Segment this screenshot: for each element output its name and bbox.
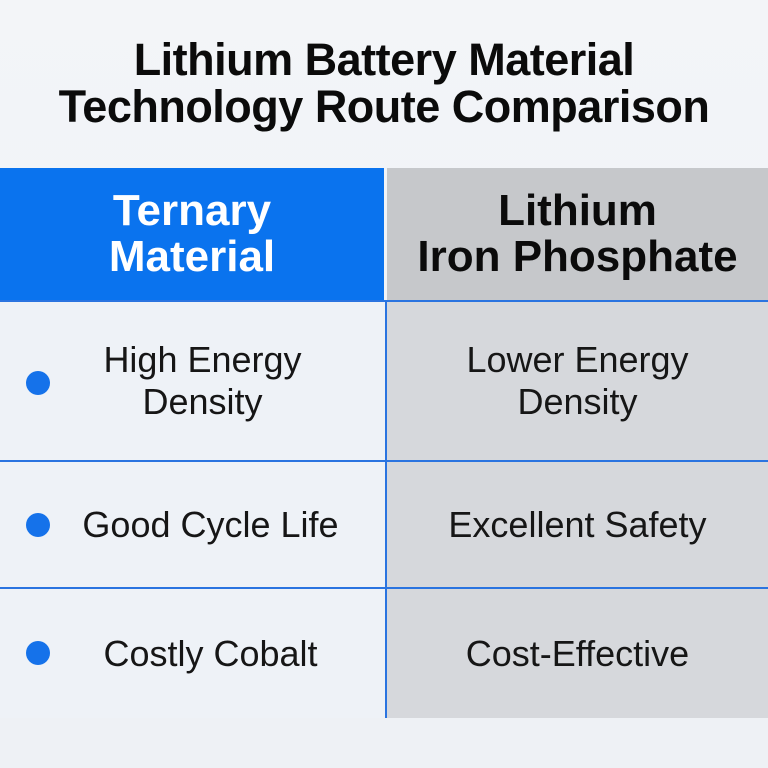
right cell: excellent safety	[385, 462, 768, 587]
header: ternary material: Ternary	[113, 186, 271, 235]
header: ternary material	[0, 168, 384, 300]
right cell: lower energy density: Density	[517, 381, 638, 422]
title: Lithium Battery Material	[134, 34, 634, 85]
header: lithium iron phosphate: Iron Phosphate	[417, 232, 738, 281]
bullet 2	[26, 513, 50, 537]
header: lithium iron phosphate	[387, 168, 768, 300]
right cell: cost-effective	[385, 589, 768, 718]
left cell: costly cobalt: Costly Cobalt	[103, 632, 318, 674]
left cell: high energy density: Density	[142, 381, 263, 422]
bullet 3	[26, 641, 50, 665]
left cell: good cycle life	[0, 462, 385, 587]
left cell: costly cobalt	[0, 589, 385, 718]
title	[59, 34, 709, 132]
left cell: high energy density	[0, 302, 385, 460]
header: ternary material: Material	[109, 232, 275, 281]
right cell: lower energy density: Lower Energy	[466, 339, 689, 380]
right cell: cost-effective: Cost-Effective	[466, 632, 689, 674]
left cell: high energy density: High Energy	[103, 339, 302, 380]
right cell: excellent safety: Excellent Safety	[448, 504, 707, 544]
title: Technology Route Comparison	[59, 81, 709, 132]
left cell: good cycle life: Good Cycle Life	[82, 504, 339, 544]
bullet 1	[26, 371, 50, 395]
right cell: lower energy density	[385, 302, 768, 460]
header: lithium iron phosphate: Lithium	[498, 186, 657, 235]
